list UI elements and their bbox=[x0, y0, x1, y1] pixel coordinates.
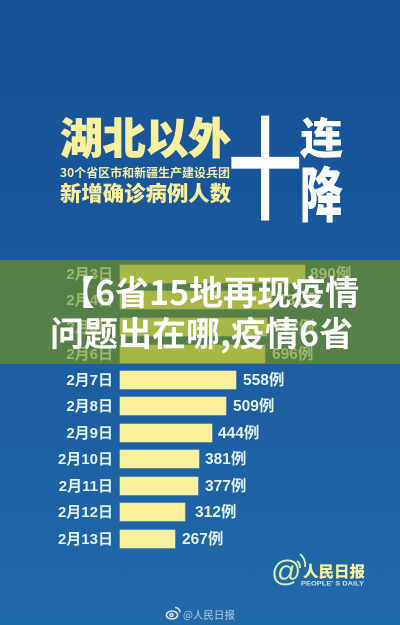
overlay headline bbox=[50, 266, 359, 356]
row 2月4日 bbox=[66, 291, 319, 309]
row 2月11日: 2月11日 bbox=[59, 478, 113, 495]
row 2月5日 bbox=[66, 318, 314, 336]
row 2月12日 bbox=[58, 503, 236, 521]
row 2月10日: 2月10日 bbox=[58, 451, 113, 468]
title line: 湖北以外 bbox=[60, 105, 231, 167]
row 2月7日: 558例 bbox=[243, 371, 284, 389]
icon: weibo bbox=[166, 608, 180, 619]
row 2月9日: 2月9日 bbox=[66, 425, 113, 442]
row 2月8日: 509例 bbox=[233, 397, 274, 415]
row 2月10日: 381例 bbox=[205, 450, 246, 468]
row 2月9日: 444例 bbox=[218, 424, 259, 442]
row 2月8日: 2月8日 bbox=[66, 398, 113, 415]
row 2月3日: 2月3日 bbox=[66, 266, 113, 283]
headline line two: 问题出在哪,疫情6省 bbox=[50, 307, 353, 356]
watermark text: @人民日报 bbox=[183, 608, 235, 622]
row 2月5日: 2月5日 bbox=[66, 319, 113, 336]
headline line one: 【6省15地再现疫情 bbox=[61, 266, 359, 315]
green overlay band bbox=[0, 260, 400, 364]
weibo watermark bbox=[166, 608, 235, 622]
row 2月7日 bbox=[66, 371, 284, 389]
row 2月5日: 707例 bbox=[273, 318, 314, 336]
row 2月6日: 2月6日 bbox=[66, 346, 113, 363]
row 2月12日: 312例 bbox=[195, 503, 236, 521]
row 2月4日: 2月4日 bbox=[66, 292, 113, 309]
row 2月6日: 696例 bbox=[272, 345, 313, 363]
icon: at sign with signal arcs: @ bbox=[271, 555, 301, 588]
headline glyphs: 十连降 bbox=[229, 83, 343, 242]
subtitle line two: 新增确诊病例人数 bbox=[60, 178, 231, 208]
row 2月11日: 377例 bbox=[205, 477, 246, 495]
row 2月3日 bbox=[66, 265, 351, 283]
row 2月13日: 2月13日 bbox=[58, 531, 113, 548]
row 2月12日: 2月12日 bbox=[58, 504, 113, 521]
row 2月7日: 2月7日 bbox=[66, 372, 113, 389]
row 2月6日 bbox=[66, 345, 313, 363]
row 2月10日 bbox=[58, 450, 246, 468]
row 2月3日: 890例 bbox=[310, 265, 351, 283]
title block: 湖北以外 bbox=[60, 105, 231, 208]
logo english name: PEOPLE' S DAILY bbox=[301, 580, 365, 588]
logo: People's Daily bbox=[271, 554, 365, 588]
row 2月13日 bbox=[58, 530, 223, 548]
row 2月4日: 731例 bbox=[278, 291, 319, 309]
character 连: 连 bbox=[300, 105, 343, 167]
logo name: 人民日报 bbox=[303, 560, 365, 582]
row 2月8日 bbox=[66, 397, 274, 415]
large character 十: 十 bbox=[229, 83, 301, 242]
row 2月13日: 267例 bbox=[182, 530, 223, 548]
row 2月9日 bbox=[66, 424, 259, 442]
bar chart: daily new cases bbox=[58, 265, 351, 548]
subtitle line: 30个省区市和新疆生产建设兵团 bbox=[60, 164, 230, 181]
character 降: 降 bbox=[300, 148, 343, 235]
row 2月11日 bbox=[59, 477, 246, 495]
